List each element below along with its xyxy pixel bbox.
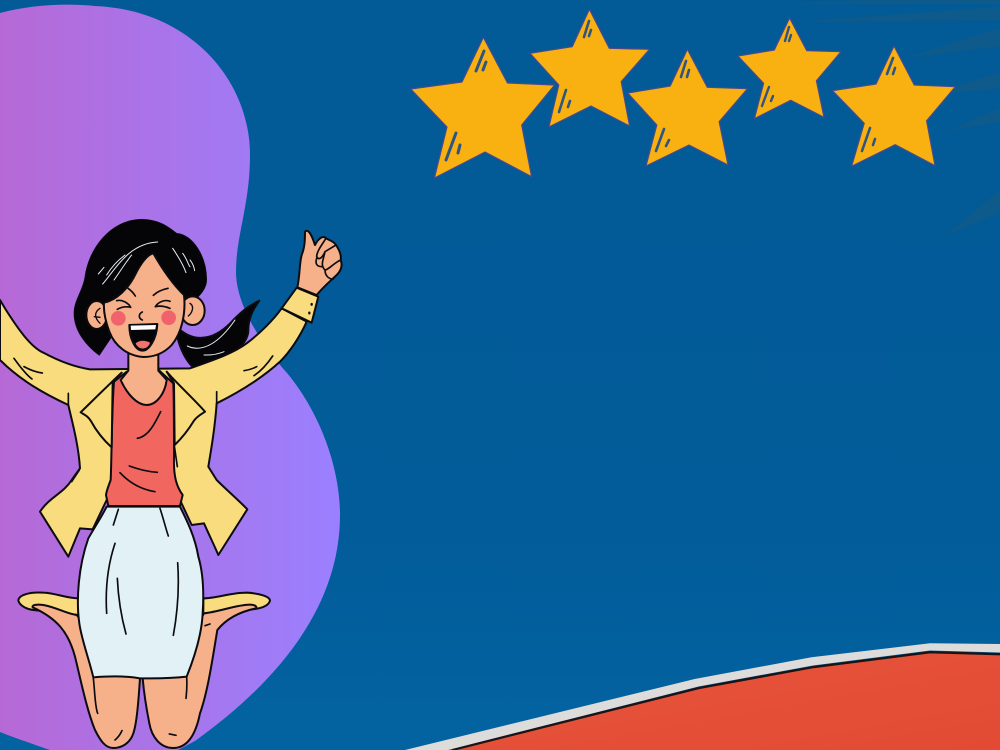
lapels	[81, 372, 205, 447]
hair highlights	[98, 242, 195, 284]
star 3	[628, 49, 748, 166]
ears	[86, 296, 205, 329]
hair back	[74, 219, 207, 355]
star 2	[530, 9, 650, 127]
cheeks	[111, 310, 176, 326]
neck	[121, 352, 167, 405]
star 4	[738, 18, 841, 119]
shirt folds	[120, 412, 161, 492]
hand thumbs up	[297, 231, 342, 295]
shirt	[106, 371, 183, 506]
nose	[139, 312, 142, 320]
red ground with white edge	[405, 643, 1000, 750]
face	[104, 253, 184, 357]
eyes and brows	[117, 287, 170, 309]
star 5	[832, 46, 955, 166]
mouth	[129, 324, 157, 351]
stars	[411, 9, 955, 178]
star 1	[411, 37, 555, 178]
ponytail	[177, 301, 259, 367]
jacket	[0, 288, 318, 557]
cuff	[282, 288, 318, 323]
character: jumping woman	[0, 219, 342, 748]
skirt	[78, 507, 203, 678]
legs	[33, 605, 256, 748]
purple blob	[0, 5, 340, 750]
sun rays top right	[775, 0, 1000, 236]
shoes	[18, 592, 270, 615]
